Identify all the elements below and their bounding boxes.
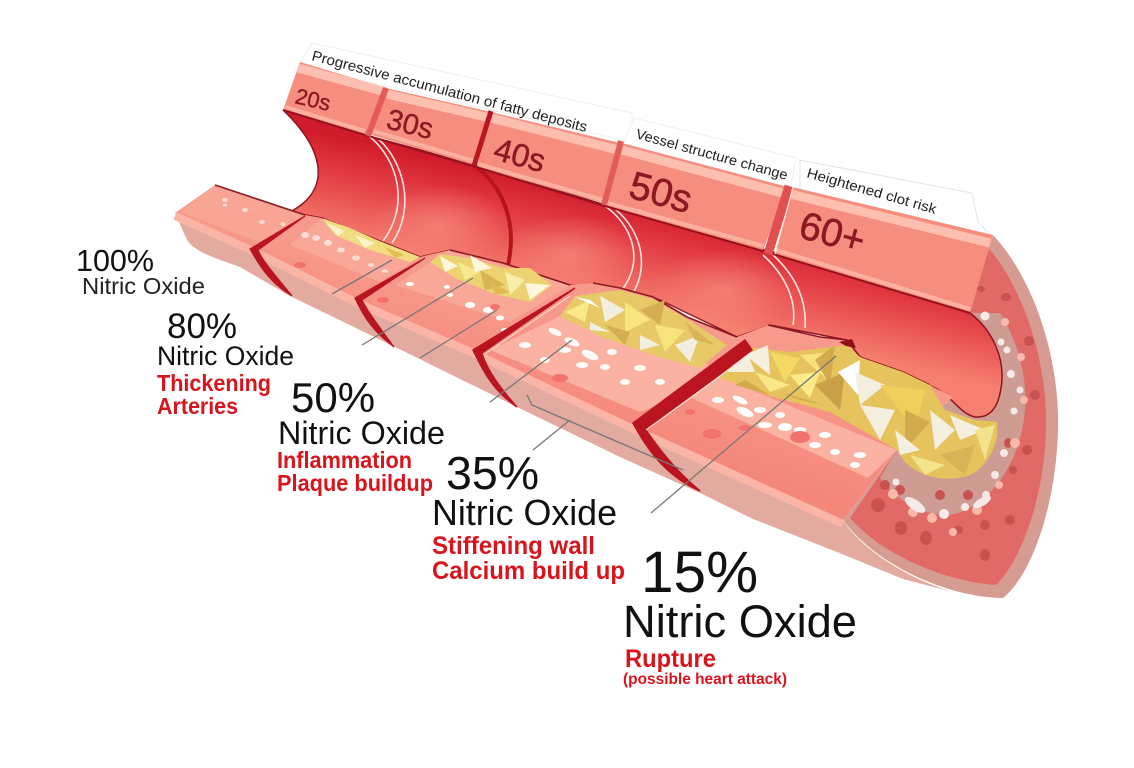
lesion tip — [839, 339, 856, 348]
leader 50% lower — [420, 310, 497, 358]
label: 35%: Nitric Oxide — [432, 492, 617, 533]
soft highlight 30s — [370, 185, 510, 265]
joint 60+ — [768, 186, 789, 254]
light band section 30s — [290, 218, 420, 282]
segment 30s — [372, 88, 491, 165]
label: 80%: Nitric Oxide — [157, 341, 294, 371]
lumen surface — [283, 110, 1002, 417]
label: 80% — [157, 307, 294, 419]
crack 20s/30s — [250, 216, 305, 296]
label: 50%: 50% — [291, 374, 375, 421]
age 30s: 30s — [383, 104, 436, 146]
dark arc 40s — [477, 167, 511, 265]
inner arc 50s — [611, 206, 641, 295]
label: 100%: 100% — [76, 244, 154, 278]
outer rim — [843, 235, 1058, 598]
light band section 20s — [180, 185, 305, 243]
label: 35%: Stiffening wall — [432, 532, 595, 560]
label: 15%: Nitric Oxide — [623, 596, 857, 647]
muscle layer — [850, 246, 1046, 585]
leader 35% lower — [533, 420, 570, 450]
crack 40s/50s — [473, 288, 575, 407]
end face of artery — [843, 235, 1058, 598]
leader 50% upper — [362, 278, 473, 345]
plaque deposits — [322, 218, 998, 479]
age 60+: 60+ — [795, 204, 870, 263]
label: 80%: Thickening — [157, 370, 271, 396]
light band section 40s — [395, 250, 570, 322]
segment 50s — [607, 143, 788, 250]
label: 50%: Inflammation — [277, 447, 412, 473]
label: 50% — [277, 374, 445, 496]
bracket — [527, 395, 683, 470]
dark top edge — [215, 185, 930, 385]
joint 40s — [474, 111, 491, 166]
joint 30s — [368, 88, 386, 136]
white arc 30s — [370, 137, 398, 241]
banner text 2: Vessel structure change — [634, 125, 790, 183]
age 20s: 20s — [293, 84, 333, 116]
leader 80% — [332, 260, 392, 294]
plaque: 50s section — [560, 290, 727, 368]
label: 100%: Nitric Oxide — [82, 273, 205, 299]
label: 15%: 15% — [641, 540, 758, 605]
label: 15%: (possible heart attack) — [623, 671, 787, 688]
label: 100% — [76, 244, 205, 299]
lower dark edge — [283, 110, 970, 313]
crack white edge 2 — [646, 358, 745, 430]
light band section 50s — [490, 316, 725, 412]
banner: progressive accumulation — [298, 43, 632, 142]
crack 30s/40s — [355, 258, 425, 347]
plaque: 60+ section — [720, 345, 998, 479]
crack 50s/60+ — [633, 340, 752, 491]
banner text 3: Heightened clot risk — [805, 165, 939, 217]
age 50s: 50s — [625, 164, 697, 222]
joint 50s — [604, 141, 621, 205]
crack white edge — [485, 296, 570, 354]
label: 50%: Nitric Oxide — [278, 415, 445, 451]
age 40s: 40s — [490, 131, 549, 179]
label: 80%: Arteries — [157, 393, 238, 419]
soft highlight 50s — [650, 250, 800, 330]
lower light strip — [175, 216, 843, 524]
red cracks between sections — [250, 216, 856, 491]
banners: white label strips — [298, 43, 990, 235]
lower highlight strip — [285, 107, 970, 309]
inner arc 30s — [376, 137, 405, 243]
top highlight strips — [298, 68, 990, 243]
white arc 60s — [763, 255, 794, 325]
white arc 50s — [605, 206, 634, 290]
inner arc 60s — [773, 255, 805, 328]
top wall band with age labels — [283, 48, 993, 313]
label: 50%: Plaque buildup — [277, 470, 433, 496]
plaque: 40s section — [430, 254, 552, 302]
dark cell dots — [871, 286, 1040, 561]
cut surface — [175, 185, 953, 520]
label: 15% — [623, 540, 857, 688]
segment 40s — [477, 112, 620, 203]
inner ring — [880, 313, 1025, 515]
soft highlight 40s — [500, 215, 640, 295]
label: 35% — [432, 447, 625, 585]
light band section 60+ — [687, 377, 897, 478]
white and pink cell dots — [888, 312, 1028, 536]
banner: vessel structure change — [622, 118, 796, 190]
joint highlight — [775, 187, 793, 254]
cell flecks on wall — [222, 198, 866, 468]
banner text 1: Progressive accumulation of fatty deposits — [310, 48, 589, 136]
leader 15% — [651, 356, 836, 513]
outer wall side — [175, 213, 1003, 598]
leader lines — [332, 260, 836, 513]
label: 35%: 35% — [446, 447, 539, 499]
label: 35%: Calcium build up — [432, 557, 625, 585]
label: 80%: 80% — [167, 307, 237, 346]
segment 60+ — [775, 187, 993, 313]
segment 20s — [283, 62, 386, 135]
banner: heightened clot risk — [800, 160, 990, 235]
leader 35% upper — [490, 340, 572, 402]
plaque: 30s section — [322, 218, 420, 262]
vessel lumen: red interior — [283, 110, 1002, 417]
label: 15%: Rupture — [625, 645, 716, 673]
lower wall of artery — [175, 185, 1003, 598]
